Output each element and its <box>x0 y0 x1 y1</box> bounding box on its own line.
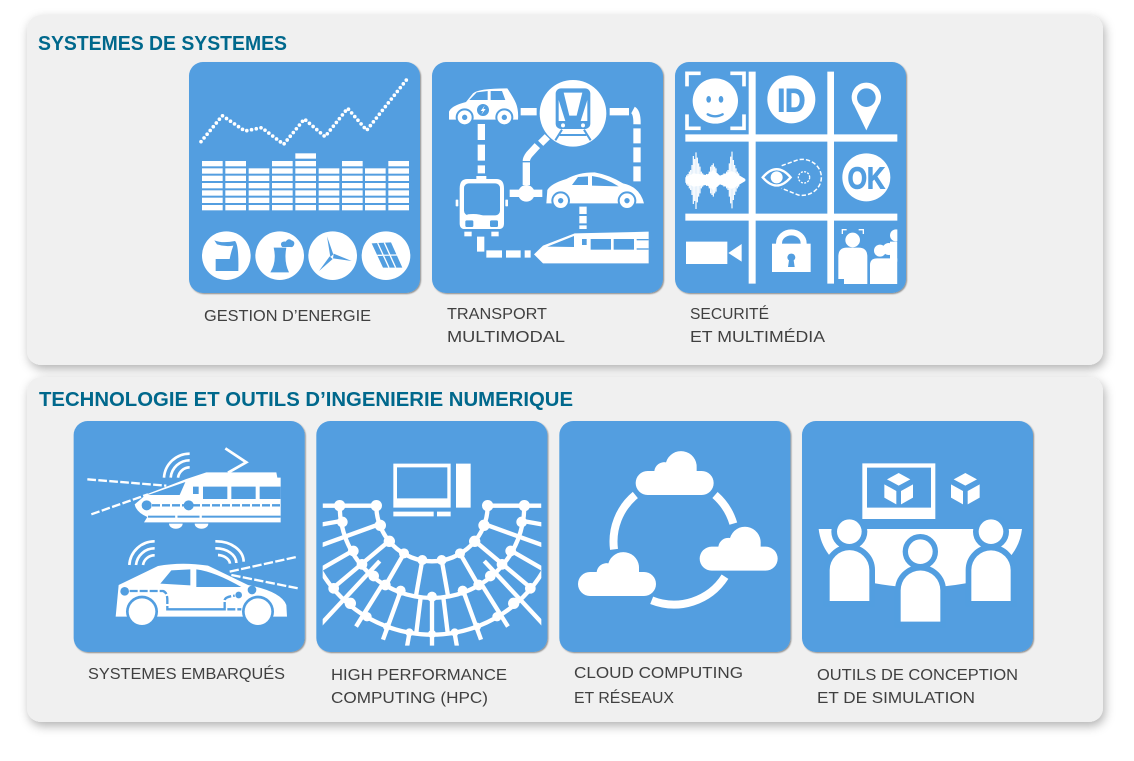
icon: screen with cube <box>862 463 935 519</box>
icon: hydro dam <box>202 231 251 280</box>
icon: ID badge <box>767 75 815 123</box>
icon: cloud right <box>700 527 778 571</box>
icon: computer <box>393 464 471 516</box>
icon: OK badge <box>842 153 890 201</box>
tile: high performance computing <box>316 421 550 654</box>
icon: nuclear plant <box>255 231 304 280</box>
icon: padlock <box>772 232 811 272</box>
tile: cloud computing <box>559 421 790 652</box>
label: high performance computing: COMPUTING (HPC) <box>331 690 488 707</box>
icon: face recognition <box>687 73 744 128</box>
icon: cloud top <box>636 451 714 495</box>
dashed network links <box>481 110 637 254</box>
tile: securite et multimedia <box>675 62 906 293</box>
icon: high-speed train <box>534 232 649 263</box>
heading: technologie et outils: TECHNOLOGIE ET OUTILS D’INGENIERIE NUMERIQUE <box>39 389 573 411</box>
label: systemes embarques: SYSTEMES EMBARQUÉS <box>88 664 285 683</box>
panel: systemes de systemes <box>27 15 1103 365</box>
label: outils de conception <box>817 667 1018 707</box>
icon: electric car <box>449 88 518 126</box>
icon: bus <box>456 176 508 236</box>
label: securite et multimedia: ET MULTIMÉDIA <box>690 327 825 346</box>
label: cloud computing: ET RÉSEAUX <box>574 688 674 707</box>
tile: transport multimodal <box>432 62 663 293</box>
icon: wind turbine <box>308 231 357 280</box>
junction node <box>518 185 535 202</box>
person center <box>901 539 940 622</box>
panel: technologie et outils <box>27 377 1103 722</box>
person left <box>830 519 869 601</box>
icon: spider-web network <box>322 500 542 646</box>
tile: systemes embarques <box>74 421 305 652</box>
equalizer bars <box>202 153 409 210</box>
tile: outils de conception <box>802 421 1033 652</box>
label: high performance computing <box>331 667 507 707</box>
label: gestion d'energie: GESTION D’ENERGIE <box>204 308 371 325</box>
icon: cloud left <box>578 552 656 596</box>
icon: metro in circle <box>540 80 606 147</box>
icon: ID badge: ID <box>777 81 805 118</box>
person right <box>971 519 1011 601</box>
icon: floating cube <box>951 473 980 504</box>
grid lines <box>685 72 897 284</box>
label: outils de conception: ET DE SIMULATION <box>817 690 975 707</box>
icon: connected train <box>87 448 281 529</box>
icon: eye tracking <box>763 159 821 195</box>
label: securite et multimedia <box>690 304 825 346</box>
icon: video camera <box>686 242 742 264</box>
icon: OK badge: OK <box>848 161 885 196</box>
icon: car <box>546 172 644 210</box>
tile: gestion d'energie <box>189 62 420 293</box>
label: securite et multimedia: SECURITÉ <box>690 304 769 323</box>
label: cloud computing <box>574 665 743 707</box>
meeting table <box>819 529 1022 587</box>
dotted line chart <box>201 78 408 144</box>
label: outils de conception: OUTILS DE CONCEPTION <box>817 667 1018 684</box>
label: transport multimodal <box>447 306 565 346</box>
ring arcs <box>614 495 733 605</box>
icon: audio waveform <box>685 152 745 209</box>
icon: people scan <box>838 229 902 284</box>
heading: systemes de systemes: SYSTEMES DE SYSTEMES <box>38 33 287 55</box>
icon: connected car <box>116 541 298 628</box>
label: high performance computing: HIGH PERFORMANCE <box>331 667 507 684</box>
label: cloud computing: CLOUD COMPUTING <box>574 665 743 682</box>
icon: location pin <box>852 83 881 130</box>
icon: solar panel <box>362 231 410 280</box>
label: transport multimodal: TRANSPORT <box>447 306 547 323</box>
label: transport multimodal: MULTIMODAL <box>447 329 565 346</box>
